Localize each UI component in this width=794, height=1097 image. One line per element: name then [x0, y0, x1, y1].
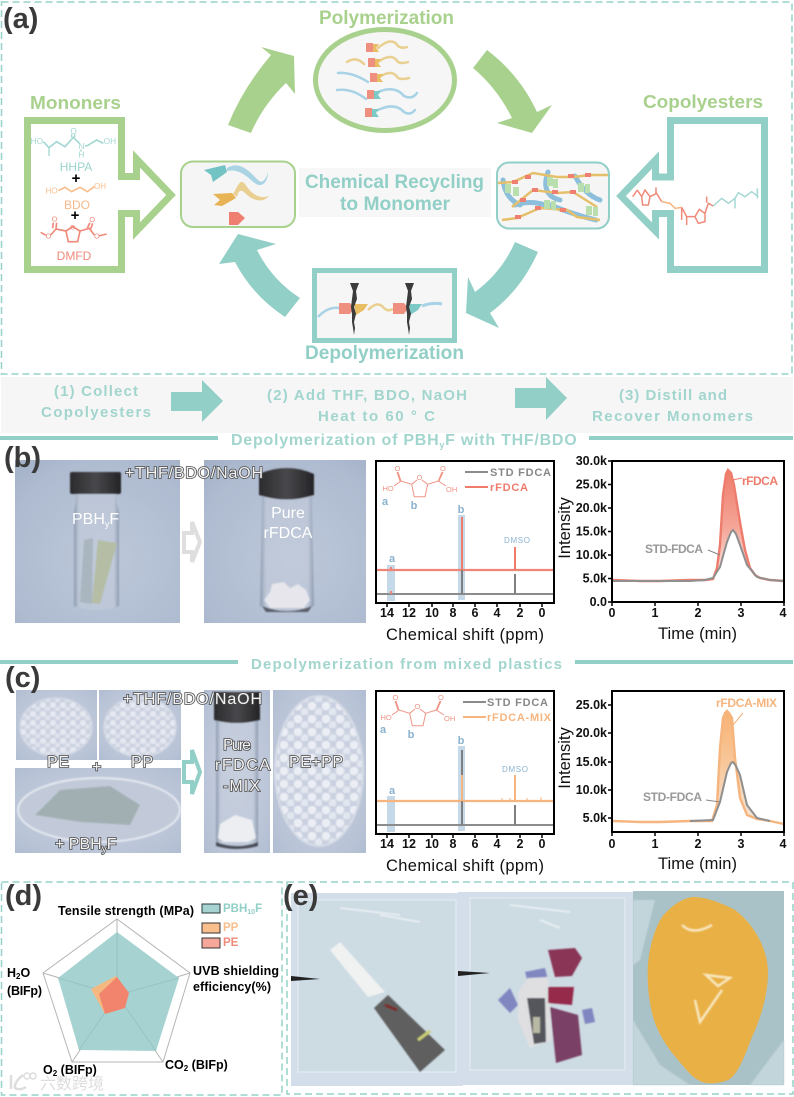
radar chart [43, 919, 190, 1062]
step 3 text [592, 387, 753, 425]
axis tick labels: 8 [450, 837, 457, 851]
label: HHPA: HHPA [60, 160, 92, 174]
box: polymer network [497, 162, 609, 228]
chart: HPLC c: 1 [652, 837, 659, 851]
legend [202, 903, 262, 949]
molecule: FDCA: O [440, 464, 446, 473]
molecule: FDCA: HO [380, 713, 392, 722]
label: PBHyF: y [105, 519, 110, 529]
molecule: DMFD [41, 214, 107, 242]
label: BDO: BDO [64, 198, 90, 212]
heading: Depolymerization: Depolymerization [305, 343, 464, 364]
section title: PBHyF depolymerization: y [439, 440, 445, 450]
axis tick labels: 10 [425, 837, 439, 851]
label: Pure rFDCA [264, 505, 313, 542]
photo: PE pellets [16, 690, 97, 760]
radar labels: O [20, 966, 30, 980]
chart: HPLC b: 20.0k [576, 501, 607, 515]
step 2 text [267, 387, 467, 425]
labels on photos: rFDCA [215, 757, 270, 774]
chart: HPLC b: 25.0k [576, 478, 607, 492]
radar labels: CO [165, 1058, 184, 1072]
chart: HPLC b: Intensity [556, 497, 574, 559]
panel: (d) radar [2, 880, 282, 1095]
step 2 text: Heat to 60 ° C [318, 408, 435, 425]
labels on photos: + PBH [55, 836, 102, 853]
label: Chemical Recycling to Monomer [299, 168, 491, 217]
molecule: FDCA: O [394, 464, 400, 473]
photo: rFDCA vial [204, 460, 366, 623]
molecule: HHPA: O [70, 126, 77, 136]
chart: HPLC b: 5.0k [583, 572, 607, 586]
symbol: plus: + [72, 170, 81, 187]
chart: NMR b: rFDCA [490, 482, 528, 494]
axis tick labels: 0 [539, 837, 546, 851]
arrow: bottom-right teal curved [466, 242, 538, 328]
chart: NMR c: rFDCA-MIX [487, 712, 552, 724]
chart: HPLC b: 10.0k [576, 548, 607, 562]
axis title: Chemical shift (ppm) [386, 626, 544, 644]
radar labels: 2 [16, 972, 21, 981]
label: Chemical Recycling to Monomer: to Monomer [340, 194, 451, 215]
section title: PBHyF depolymerization: F with THF/BDO [445, 432, 577, 449]
photo: PBHyF film in dish [15, 768, 181, 853]
step 1 text: Copolyesters [41, 404, 151, 421]
photo: mango in bag [633, 891, 784, 1085]
chart: HPLC b: 2 [695, 606, 702, 620]
arrow: bottom-left teal curved [219, 234, 300, 317]
radar labels: (BIFp) [188, 1058, 228, 1072]
molecule: HHPA: N [78, 141, 84, 151]
legend: PP [223, 922, 239, 934]
chart: NMR b: a [389, 553, 396, 565]
chart: HPLC b: 3 [738, 606, 745, 620]
labels on photos: y [102, 844, 107, 855]
chart: HPLC b: 1 [652, 606, 659, 620]
watermark [11, 1073, 104, 1093]
chart: NMR c: DMSO [502, 765, 528, 774]
arrow: gray step [184, 522, 200, 562]
panel: process steps [1, 377, 793, 433]
axis tick labels: 4 [494, 837, 501, 851]
chart: NMR b: b [458, 504, 465, 516]
labels on photos: PE+PP [289, 754, 343, 771]
labels on photos: -MIX [223, 778, 260, 795]
molecule: DMFD: O [89, 215, 95, 224]
labels on photos: PE [47, 754, 69, 771]
axis tick labels: 2 [517, 837, 524, 851]
label: DMFD: DMFD [57, 249, 92, 263]
photo: glue tube in bag [291, 893, 463, 1086]
panel: (e) photos [283, 880, 793, 1094]
heading: Mononers: Mononers [30, 93, 121, 113]
axis tick labels [380, 837, 546, 851]
molecule: FDCA: HO [382, 484, 394, 493]
photo: robot model in bag [458, 892, 633, 1085]
radar labels: (BIFp) [7, 984, 42, 998]
label: (c): (c) [5, 662, 40, 694]
chart: HPLC b: 15.0k [576, 524, 607, 538]
labels on photos [47, 737, 343, 855]
heading: (a): (a) [3, 3, 38, 35]
chart: HPLC c: 4 [780, 837, 787, 851]
chart: HPLC c: 3 [738, 837, 745, 851]
axis tick labels [380, 606, 546, 620]
arrow: copolyesters frame [621, 120, 764, 270]
label: Pure rFDCA: Pure [271, 505, 305, 522]
label: (b): (b) [4, 442, 41, 474]
chart: HPLC b: Time (min) [658, 625, 737, 643]
chart: NMR b: DMSO [504, 536, 530, 545]
axis tick labels: 12 [402, 606, 416, 620]
label: PBHyF: F [109, 511, 119, 528]
arrow: mononers frame [28, 120, 171, 270]
molecule: DMFD: O [70, 224, 75, 231]
arrow: teal step [184, 750, 200, 794]
chart: HPLC b: 4 [780, 606, 787, 620]
section title: mixed plastics: Depolymerization from mixed plastics [251, 656, 562, 673]
legend: F [255, 903, 262, 915]
labels on photos: PP [131, 754, 153, 771]
axis title: Chemical shift (ppm) [386, 857, 544, 875]
chart: HPLC c: 10.0k [576, 783, 607, 797]
chart: HPLC b: 0 [609, 606, 616, 620]
radar labels: H [7, 966, 16, 980]
molecule: FDCA: OH [444, 714, 455, 723]
molecule: FDCA: a [382, 496, 389, 508]
legend: 10 [247, 909, 255, 916]
chart: HPLC b: rFDCA [742, 474, 778, 488]
chart: HPLC c: 15.0k [576, 755, 607, 769]
arrow: top-left green curved [228, 47, 295, 133]
step 3 text: Recover Monomers [592, 408, 753, 425]
photo: PP pellets [99, 690, 181, 760]
molecule: HHPA: OH [104, 136, 116, 146]
axis tick labels: 10 [425, 606, 439, 620]
chart: NMR b: STD FDCA [490, 467, 551, 479]
label: Pure rFDCA: rFDCA [264, 525, 313, 542]
label: Chemical Recycling to Monomer: Chemical Recycling [305, 172, 484, 193]
molecule: FDCA: O [414, 702, 420, 711]
molecule: DMFD: O [52, 214, 58, 223]
molecule: FDCA: O [438, 693, 444, 702]
chart: HPLC c: 20.0k [576, 726, 607, 740]
labels on photos: + [92, 759, 101, 776]
step 2 text: (2) Add THF, BDO, NaOH [267, 387, 467, 404]
photo: PE+PP pellets [273, 690, 366, 853]
section title: mixed plastics [0, 656, 793, 673]
heading: Polymerization: Polymerization [319, 8, 454, 29]
radar labels: efficiency(%) [193, 980, 271, 994]
photo: PBHyF vial [15, 460, 180, 623]
label: PBHyF: PBH [72, 511, 105, 528]
label: (d): (d) [5, 880, 42, 912]
molecule: BDO: HO [46, 186, 58, 195]
diagram: depolymerization chain [314, 270, 454, 340]
chart: HPLC c: 0 [609, 837, 616, 851]
molecule: HHPA: HO [31, 136, 44, 146]
axis tick labels: 0 [539, 606, 546, 620]
legend: PE [223, 937, 239, 949]
axis tick labels: 6 [472, 606, 479, 620]
radar labels: UVB shielding [193, 964, 279, 978]
molecule: copolyester chain [633, 187, 758, 225]
axis tick labels: 12 [402, 837, 416, 851]
chart: NMR c: STD FDCA [487, 697, 548, 709]
radar labels: O [43, 1063, 53, 1077]
chart: HPLC c: rFDCA-MIX [716, 696, 777, 710]
radar labels [7, 904, 279, 1078]
molecule: FDCA: O [416, 473, 422, 482]
section title: PBHyF depolymerization: Depolymerization of PBH [231, 432, 439, 449]
diagram: polymer chains in ellipse [316, 30, 454, 130]
chart: HPLC b: STD-FDCA [645, 542, 703, 556]
panel: (a) recycling cycle [2, 2, 792, 374]
arrow: step 1 to 2 [171, 380, 223, 422]
step 3 text: (3) Distill and [619, 387, 727, 404]
heading: Copolyesters: Copolyesters [643, 92, 763, 112]
legend: PBH [223, 903, 247, 915]
chart: NMR b [376, 461, 554, 644]
molecule: FDCA: b [411, 500, 418, 512]
radar labels: Tensile strength (MPa) [58, 904, 194, 918]
axis tick labels: 2 [517, 606, 524, 620]
labels on photos: F [107, 836, 117, 853]
chart: HPLC c [556, 691, 787, 873]
radar labels: 2 [184, 1064, 189, 1073]
axis tick labels: 8 [450, 606, 457, 620]
radar labels: 2 [53, 1069, 58, 1078]
axis tick labels: 6 [472, 837, 479, 851]
label: (e): (e) [283, 880, 318, 912]
labels on photos: Pure [223, 737, 251, 754]
step 1 text [41, 383, 151, 421]
label: reagent: +THF/BDO/NaOH [125, 465, 263, 482]
molecule: FDCA: OH [446, 485, 457, 494]
chart: HPLC b [556, 454, 787, 643]
symbol: plus: + [71, 207, 80, 224]
molecule: DMFD: O [46, 231, 52, 240]
section title: PBHyF depolymerization [0, 432, 793, 450]
molecule: FDCA [380, 693, 455, 741]
radar labels: (BIFp) [57, 1063, 97, 1077]
panel: (c) [5, 662, 787, 875]
chart: HPLC c: Intensity [556, 727, 574, 789]
arrow: step 2 to 3 [515, 377, 567, 420]
chart: HPLC b: 30.0k [576, 454, 607, 468]
molecule: DMFD: O [94, 231, 100, 240]
chart: HPLC c: 2 [695, 837, 702, 851]
molecule: HHPA: H [78, 150, 84, 160]
photo: rFDCA-MIX vial [204, 690, 270, 853]
chart: HPLC c: Time (min) [658, 855, 737, 873]
chart: NMR c: b [458, 735, 465, 747]
chart: NMR c: a [389, 785, 396, 797]
box: monomers [181, 162, 295, 227]
axis tick labels: 4 [494, 606, 501, 620]
chart: HPLC c: 5.0k [583, 811, 607, 825]
watermark: 六数跨境 [40, 1074, 104, 1093]
chart: HPLC c: STD-FDCA [643, 790, 702, 804]
arrow: top-right green curved [473, 50, 552, 133]
molecule: BDO [46, 182, 106, 195]
axis tick labels: 14 [380, 606, 394, 620]
chart: HPLC b: 0.0 [590, 595, 607, 609]
step 1 text: (1) Collect [54, 383, 138, 400]
chart: NMR c [376, 691, 554, 875]
label: reagent: +THF/BDO/NaOH [123, 691, 262, 708]
molecule: FDCA [382, 464, 457, 512]
molecule: BDO: OH [94, 182, 106, 191]
molecule: FDCA: a [380, 724, 387, 736]
molecule: HHPA [31, 126, 116, 160]
molecule: FDCA: O [392, 693, 398, 702]
panel: (b) [4, 442, 787, 644]
chart: HPLC c: 25.0k [576, 698, 607, 712]
molecule: FDCA: b [408, 729, 415, 741]
axis tick labels: 14 [380, 837, 394, 851]
